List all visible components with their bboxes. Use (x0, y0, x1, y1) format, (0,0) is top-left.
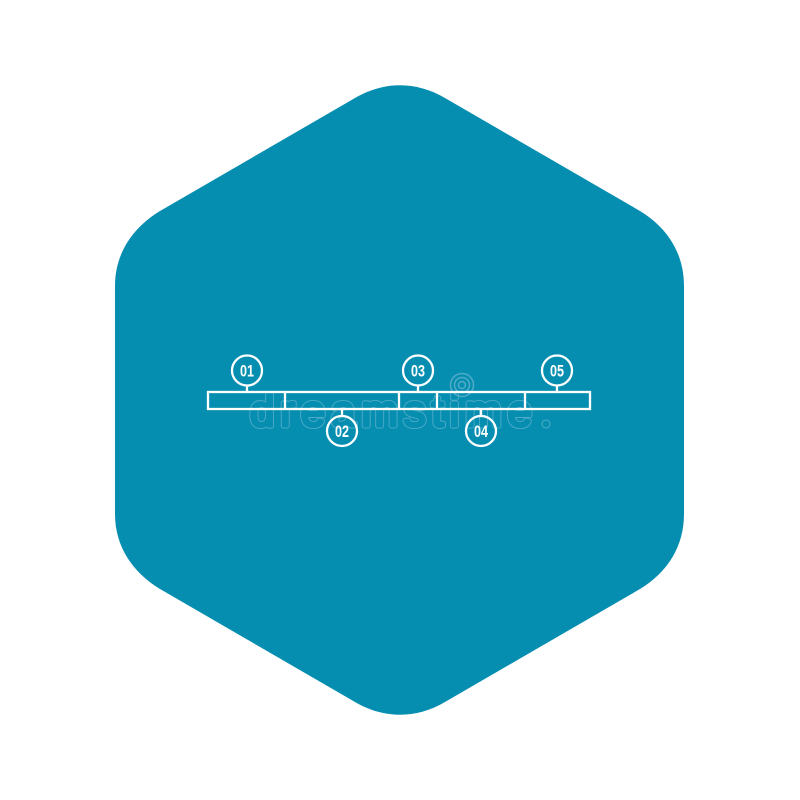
watermark: dreamstime (250, 387, 532, 436)
timeline (208, 356, 590, 446)
marker 04 (466, 409, 496, 446)
marker 01: 01 (240, 362, 254, 380)
marker 03 (403, 356, 433, 392)
marker 02 (327, 409, 357, 446)
marker 02: 02 (335, 422, 349, 441)
watermark: dreamstime (250, 387, 532, 436)
marker 05: 05 (550, 362, 564, 380)
marker 03: 03 (411, 362, 425, 380)
marker 04: 04 (474, 422, 488, 441)
marker 05 (542, 356, 572, 392)
rounded hexagon background (115, 85, 684, 715)
timeline bar (208, 392, 590, 409)
marker 01 (232, 356, 262, 392)
